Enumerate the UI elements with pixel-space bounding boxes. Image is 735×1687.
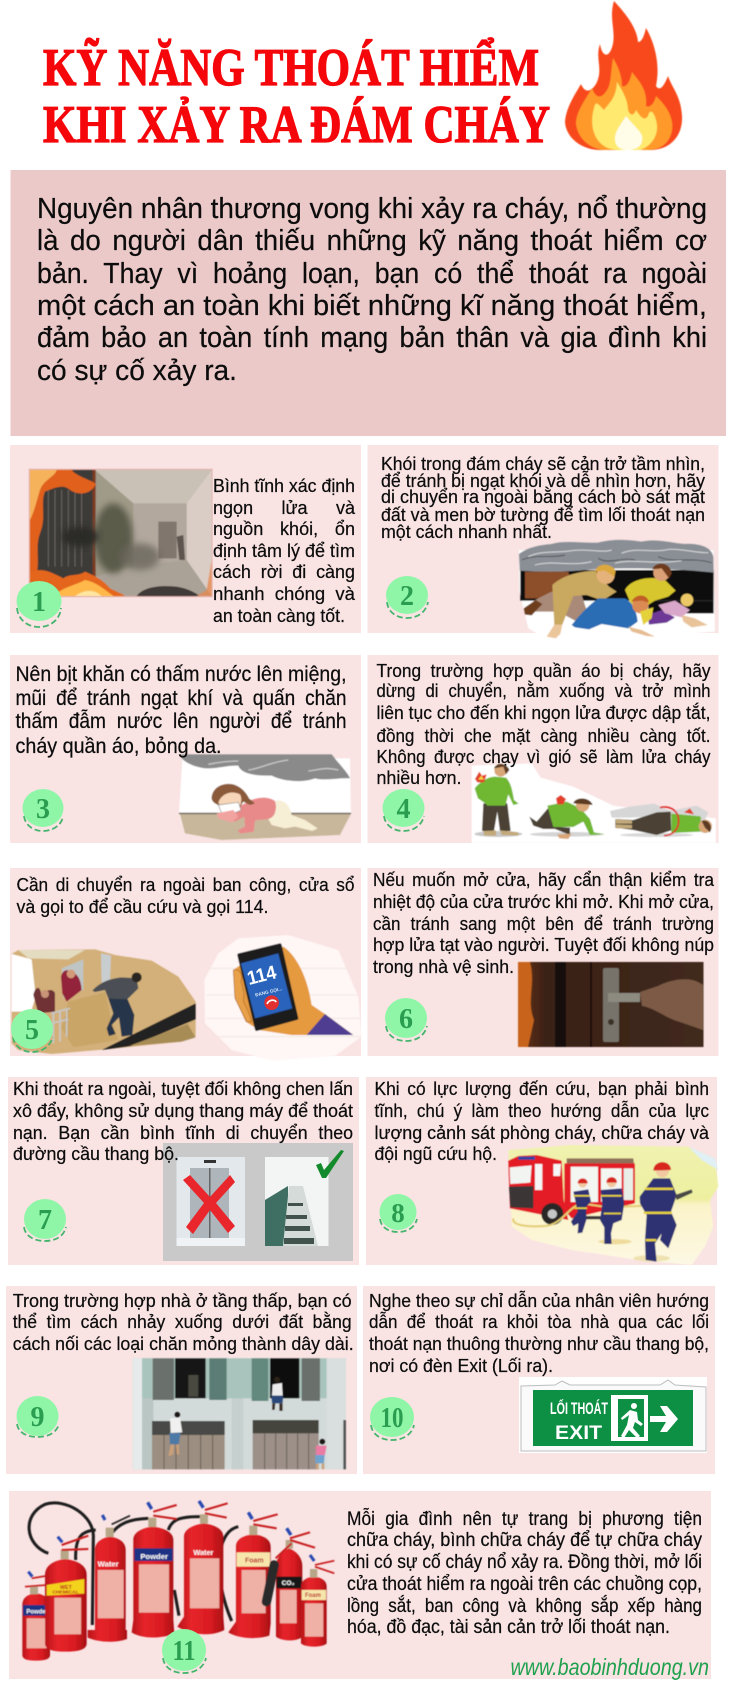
panel 1 bbox=[10, 445, 361, 633]
photo: man on balcony bbox=[12, 949, 196, 1054]
panel 10 bbox=[363, 1286, 715, 1474]
intro text: là do người dân thiếu những kỹ năng thoát hiểm cơ bbox=[37, 225, 707, 257]
text: cách nối các loại chăn mỏng thành dây dài. bbox=[13, 1333, 354, 1354]
badge 8 bbox=[380, 1194, 417, 1232]
panel 7 bbox=[8, 1077, 359, 1265]
badge 3 bbox=[22, 789, 64, 831]
text: lồng sắt, ban công và không sắp xếp hàng bbox=[347, 1595, 702, 1617]
illustration: phone call 114: 114 bbox=[245, 962, 279, 990]
text: dẫn để thoát ra khỏi tòa nhà qua các lối bbox=[369, 1311, 709, 1332]
text: nhiệt độ của cửa trước khi mở. Khi mở cửa, bbox=[373, 891, 714, 912]
badge 2 bbox=[386, 576, 428, 618]
text bbox=[16, 874, 354, 917]
illustration: stop drop roll bbox=[472, 763, 716, 843]
panel: intro bbox=[10, 170, 726, 436]
illustration: firefighters bbox=[508, 1145, 718, 1265]
text: Nên bịt khăn có thấm nước lên miệng, bbox=[16, 663, 346, 686]
image: elevator vs stairs bbox=[163, 1143, 353, 1261]
badge 9: 9 bbox=[30, 1402, 44, 1433]
text: chữa cháy, bình chữa cháy để tự chữa cháy bbox=[347, 1530, 702, 1551]
title: KHI XẢY RA ĐÁM CHÁY bbox=[43, 96, 550, 154]
text: cần tránh sang một bên để tránh trường bbox=[373, 913, 714, 934]
badge 8: 8 bbox=[391, 1198, 405, 1228]
text: an toàn càng tốt. bbox=[213, 605, 345, 626]
extinguisher: CO2 bbox=[261, 1528, 315, 1640]
text: cửa thoát hiểm ra ngoài trên các chuồng cọp, bbox=[347, 1574, 702, 1595]
extinguisher: water large bbox=[177, 1501, 228, 1634]
extinguishers bbox=[22, 1501, 334, 1661]
text: di chuyển ra ngoài bằng cách bò sát mặt bbox=[381, 486, 705, 507]
extinguisher: foam: Foam bbox=[245, 1558, 264, 1565]
extinguisher: water large: Water bbox=[193, 1548, 214, 1557]
text: Khi có lực lượng đến cứu, bạn phải bình bbox=[374, 1078, 709, 1099]
extinguisher: powder small: Powder bbox=[26, 1609, 49, 1615]
illustration: phone call 114 bbox=[204, 935, 362, 1061]
badge 1: 1 bbox=[32, 587, 46, 618]
text: hóa, đồ đạc, tài sản cản trở lối thoát nạn. bbox=[347, 1617, 670, 1638]
intro text: Nguyên nhân thương vong khi xảy ra cháy, nổ thường bbox=[37, 193, 707, 225]
text: đồng thời che mặt càng nhiều càng tốt. bbox=[376, 725, 710, 746]
title: KỸ NĂNG THOÁT HIỂM bbox=[43, 38, 539, 97]
extinguisher: foam small bbox=[301, 1555, 334, 1647]
badge 6 bbox=[385, 998, 427, 1041]
text: tĩnh, chú ý làm theo hướng dẫn của lực bbox=[374, 1100, 709, 1121]
text: nhiều hơn. bbox=[376, 767, 462, 788]
text bbox=[381, 454, 705, 542]
exit sign bbox=[519, 1377, 707, 1453]
text: Không được chạy vì gió sẽ làm lửa cháy bbox=[376, 746, 711, 767]
photo: fire in corridor bbox=[29, 469, 213, 597]
text: nơi có đèn Exit (Lối ra). bbox=[369, 1355, 553, 1376]
elevator bbox=[176, 1157, 245, 1246]
extinguisher: wet chemical bbox=[45, 1536, 88, 1652]
text: nhanh chóng và bbox=[213, 583, 356, 604]
text bbox=[376, 660, 711, 788]
badge 5: 5 bbox=[25, 1015, 39, 1046]
text: và gọi to để cầu cứu và gọi 114. bbox=[16, 896, 268, 917]
extinguisher: CO2: CO₂ bbox=[282, 1580, 295, 1587]
text: nguồn khói, ổn bbox=[213, 518, 355, 539]
intro text: một cách an toàn khi biết những kĩ năng thoát hiểm, bbox=[37, 290, 707, 322]
text: Mỗi gia đình nên tự trang bị phương tiện bbox=[347, 1508, 702, 1530]
extinguisher: wet chemical: WET bbox=[60, 1585, 73, 1591]
extinguisher: foam bbox=[228, 1512, 278, 1638]
text: Khói trong đám cháy sẽ cản trở tầm nhìn, bbox=[381, 454, 705, 474]
text bbox=[369, 1290, 709, 1376]
panel 8 bbox=[366, 1077, 718, 1265]
badge 10: 10 bbox=[380, 1403, 404, 1434]
text: hợp lửa tạt vào người. Tuyệt đối không núp bbox=[373, 934, 714, 955]
text: thoát nạn thuông thường như cầu thang bộ, bbox=[369, 1333, 709, 1354]
intro text: có sự cố xảy ra. bbox=[37, 355, 237, 387]
text: xô đẩy, không sử dụng thang máy để thoát bbox=[13, 1100, 353, 1121]
text: nạn. Bạn cần bình tĩnh di chuyển theo bbox=[13, 1122, 353, 1143]
text: trong nhà vệ sinh. bbox=[373, 956, 514, 977]
extinguisher: powder small bbox=[22, 1572, 55, 1661]
text: thể tìm cách nhảy xuống dưới đất bằng bbox=[13, 1311, 352, 1332]
photo: hand on door handle bbox=[518, 962, 704, 1047]
badge 5 bbox=[11, 1009, 53, 1052]
text bbox=[347, 1508, 702, 1638]
exit sign: EXIT bbox=[555, 1423, 602, 1444]
badge 7: 7 bbox=[38, 1205, 52, 1236]
hoses bbox=[29, 1503, 238, 1625]
text: thấm đẫm nước lên người để tránh bbox=[16, 710, 346, 733]
title bbox=[43, 38, 550, 154]
stairs bbox=[265, 1150, 344, 1246]
text bbox=[13, 1290, 354, 1354]
text bbox=[373, 869, 715, 977]
badge 10 bbox=[370, 1397, 414, 1440]
text: đất và men bờ tường để tìm lối thoát nạn bbox=[381, 505, 705, 525]
illustration: phone call 114: ĐANG GỌI... bbox=[255, 986, 282, 998]
text: cháy quần áo, bỏng da. bbox=[16, 735, 222, 758]
text bbox=[213, 475, 356, 626]
extinguisher: water bbox=[88, 1515, 130, 1642]
text: liên tục cho đến khi ngọn lửa được dập tắt, bbox=[376, 702, 710, 723]
extinguisher: water: Water bbox=[98, 1560, 119, 1569]
panel 6 bbox=[368, 868, 718, 1056]
text: ngọn lửa và bbox=[213, 497, 356, 518]
panel 9 bbox=[6, 1286, 357, 1474]
badge 3: 3 bbox=[36, 794, 50, 825]
exit sign: LỐI THOÁT bbox=[550, 1398, 608, 1418]
extinguisher: wet chemical: CHEMICAL bbox=[52, 1589, 79, 1595]
extinguisher: powder large: Powder bbox=[140, 1552, 168, 1561]
badge 11 bbox=[162, 1629, 206, 1673]
badge 6: 6 bbox=[399, 1004, 413, 1035]
text: đội ngũ cứu hộ. bbox=[374, 1143, 497, 1164]
badge 2: 2 bbox=[400, 581, 414, 612]
text bbox=[13, 1078, 353, 1164]
text: để tránh bị ngạt khói và dễ nhìn hơn, hãy bbox=[381, 470, 705, 491]
text: một cách nhanh nhất. bbox=[381, 522, 552, 542]
text: lượng cảnh sát phòng cháy, chữa cháy và bbox=[374, 1122, 710, 1143]
panel 4 bbox=[368, 655, 718, 843]
panel 2 bbox=[368, 445, 718, 641]
text: khi có sự cố cháy nổ xảy ra. Đồng thời, mở lối bbox=[347, 1552, 702, 1573]
badge 7 bbox=[24, 1199, 66, 1241]
text: Bình tĩnh xác định bbox=[213, 475, 355, 496]
text bbox=[16, 663, 346, 758]
icon: flame bbox=[565, 1, 682, 150]
text: cách rời đi càng bbox=[213, 561, 355, 582]
illustration: crawling under smoke bbox=[519, 540, 715, 641]
text: Trong trường hợp nhà ở tầng thấp, bạn có bbox=[13, 1290, 352, 1311]
text: Nghe theo sự chỉ dẫn của nhân viên hướng bbox=[369, 1290, 709, 1311]
photo: building with ropes bbox=[133, 1358, 346, 1469]
badge 1 bbox=[16, 581, 62, 627]
text bbox=[374, 1078, 710, 1164]
text: Khi thoát ra ngoài, tuyệt đối không chen lấn bbox=[13, 1078, 353, 1099]
text: Trong trường hợp quần áo bị cháy, hãy bbox=[376, 660, 711, 681]
illustration: girl crawling bbox=[179, 754, 351, 840]
badge 9 bbox=[16, 1396, 59, 1437]
extinguisher: powder large bbox=[132, 1502, 177, 1637]
text: mũi để tránh ngạt khí và quấn chăn bbox=[16, 687, 346, 710]
panel 3 bbox=[10, 655, 361, 843]
panel 5 bbox=[10, 868, 362, 1061]
panel 11 bbox=[9, 1491, 711, 1680]
extinguisher: foam small: Foam bbox=[305, 1593, 321, 1599]
text: đường cầu thang bộ. bbox=[13, 1143, 179, 1164]
intro text bbox=[37, 193, 707, 387]
intro text: đảm bảo an toàn tính mạng bản thân và gia đình khi bbox=[37, 322, 707, 354]
text: Nếu muốn mở cửa, hãy cẩn thận kiểm tra bbox=[373, 869, 715, 890]
text: Cần di chuyển ra ngoài ban công, cửa sổ bbox=[16, 874, 354, 895]
text: định tâm lý để tìm bbox=[213, 540, 355, 561]
badge 4 bbox=[382, 789, 424, 831]
badge 11: 11 bbox=[172, 1636, 196, 1667]
badge 4: 4 bbox=[396, 794, 410, 825]
